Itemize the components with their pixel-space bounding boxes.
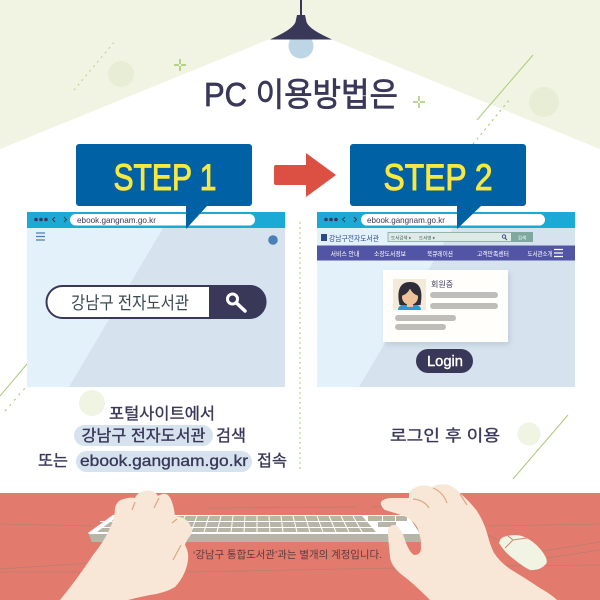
text block: step 1 description [38,405,287,472]
icon: magnifier [228,294,245,311]
browser dots [34,218,48,221]
site navigation bar: 소장도서정보 [374,249,406,258]
desk band [0,493,600,600]
panel: step 2 browser [317,212,575,387]
panel: step 1 browser [27,212,285,387]
site search box: 도서검색 ▾ [391,234,412,242]
browser arrows [342,217,356,222]
text block: step 1 description: 또는 [38,452,68,470]
right hand [381,484,557,600]
left hand [60,490,192,600]
address bar [361,214,545,226]
callout: step 1: STEP 1 [114,157,216,198]
icon: sparkle right [413,96,425,108]
notice text: ‘강남구 통합도서관’과는 별개의 계정입니다. [193,548,382,561]
member card [383,270,510,345]
decorative lower circles and lines [0,222,568,479]
site search box [388,232,533,242]
title: PC 이용방법은 [204,76,398,113]
callout: step 1 [76,144,252,229]
browser arrows [52,217,66,222]
member card: 회원증 [431,280,453,289]
icon: sparkle left [174,59,186,71]
site logo: 강남구전자도서관 [329,233,379,243]
browser dots [324,218,338,221]
search bar [46,285,266,318]
site search box: 검색 [518,234,526,242]
login button [416,349,473,373]
portrait [393,279,426,310]
highlight: url: ebook.gangnam.go.kr [80,453,249,470]
site navigation bar: 도서관소개 [528,249,553,258]
address bar: ebook.gangnam.go.kr [77,215,156,225]
login button: Login [427,354,463,370]
lamp [270,0,332,58]
callout: step 2 [350,144,526,229]
mouse [499,535,547,570]
text block: step 1 description: 포털사이트에서 [109,405,215,423]
site navigation bar: 서비스 안내 [330,249,360,258]
user dot [268,235,278,245]
text block: step 1 description: 접속 [257,452,287,470]
site navigation bar: 북큐레이션 [427,249,453,258]
text block: step 1 description: 검색 [216,427,246,445]
menu icon [36,233,45,240]
keyboard [88,515,420,542]
site search box: 도서명 ▾ [419,234,436,242]
search bar: 강남구 전자도서관 [71,293,189,313]
address bar: ebook.gangnam.go.kr [367,215,445,225]
background roof panel [0,0,600,149]
address bar [70,214,255,226]
arrow [274,153,336,197]
callout: step 2: STEP 2 [384,157,492,198]
site navigation bar: 고객만족센터 [477,249,509,258]
site navigation bar [317,246,575,260]
text block: step 2 description: 로그인 후 이용 [390,427,500,445]
highlight: library name: 강남구 전자도서관 [82,427,206,445]
